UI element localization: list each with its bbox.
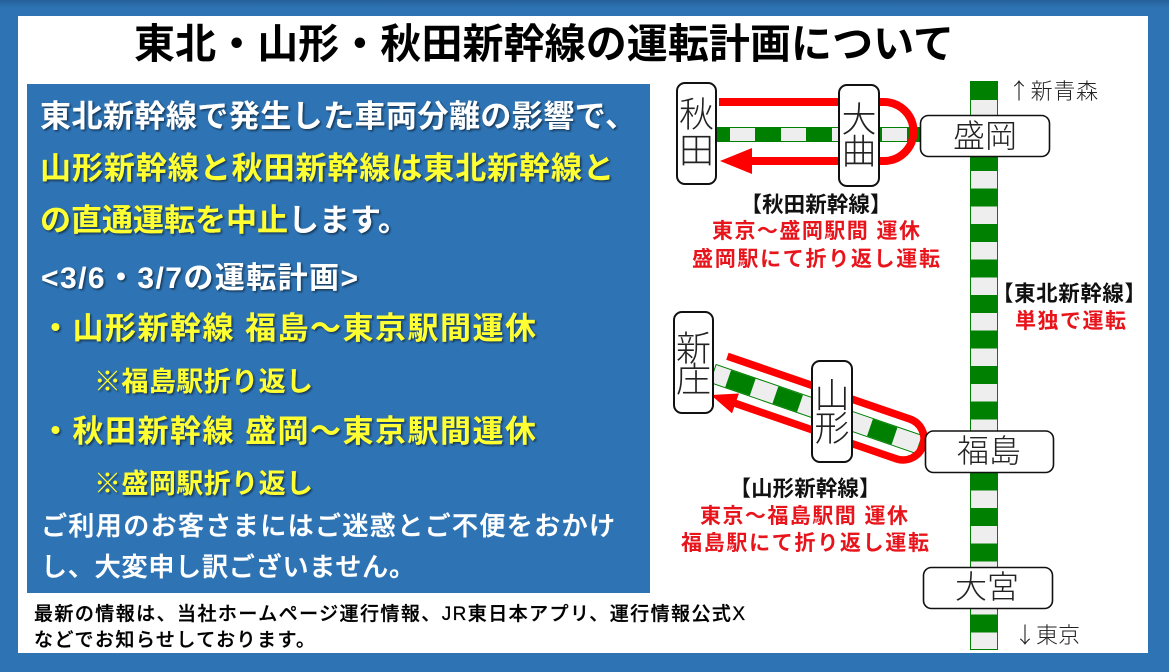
text block: operation plan: <3/6・3/7の運転計画> bbox=[41, 262, 358, 295]
station: 山形: 形 bbox=[814, 401, 850, 452]
text block: operation plan: ・秋田新幹線 盛岡～東京駅間運休 bbox=[40, 414, 536, 449]
label: Yamagata Shinkansen plan: 福島駅にて折り返し運転 bbox=[681, 532, 929, 555]
text block: footer note: 最新の情報は、当社ホームページ運行情報、JR東日本アプリ、運行情報公式X bbox=[34, 603, 745, 625]
text block: footer note bbox=[34, 603, 745, 651]
station: 山形: 山 bbox=[814, 368, 850, 419]
text block: apology bbox=[41, 511, 615, 582]
diagram: Tohoku Shinkansen track bbox=[970, 81, 998, 650]
station: 秋田: 田 bbox=[679, 123, 714, 174]
title: 東北・山形・秋田新幹線の運転計画について bbox=[134, 21, 954, 67]
label: Tohoku Shinkansen plan: 単独で運転 bbox=[1015, 310, 1126, 333]
station: 山形 bbox=[812, 361, 852, 462]
label: Akita Shinkansen plan: 東京～盛岡駅間 運休 bbox=[712, 220, 920, 243]
diagram: Yamagata Shinkansen branch bbox=[703, 354, 930, 476]
label: Akita Shinkansen plan bbox=[692, 193, 940, 271]
station: 新庄 bbox=[674, 312, 713, 413]
label: Yamagata Shinkansen plan: 【山形新幹線】 bbox=[730, 477, 880, 501]
diagram: Akita Shinkansen branch bbox=[716, 102, 922, 174]
station: 福島 bbox=[926, 426, 1054, 472]
panel: operation plan text bbox=[27, 84, 650, 593]
label: Yamagata Shinkansen plan bbox=[681, 477, 929, 555]
station: 大宮: 大宮 bbox=[955, 562, 1019, 608]
text block: intro message bbox=[40, 99, 636, 238]
label: Tohoku Shinkansen plan bbox=[992, 282, 1146, 333]
label: to Shin-Aomori: ↑新青森 bbox=[1008, 74, 1098, 106]
label: Akita Shinkansen plan: 盛岡駅にて折り返し運転 bbox=[692, 248, 940, 271]
station: 福島: 福島 bbox=[957, 426, 1021, 472]
text block: operation plan: ※盛岡駅折り返し bbox=[94, 469, 313, 499]
station: 大宮 bbox=[924, 562, 1052, 608]
station: 新庄: 庄 bbox=[676, 352, 711, 403]
label: Yamagata Shinkansen plan: 東京～福島駅間 運休 bbox=[700, 505, 908, 528]
station: 盛岡 bbox=[920, 111, 1050, 157]
text block: intro message: 山形新幹線と秋田新幹線は東北新幹線と bbox=[40, 151, 614, 186]
text block: apology: し、大変申し訳ございません。 bbox=[41, 552, 415, 582]
label: Tohoku Shinkansen plan: 【東北新幹線】 bbox=[992, 282, 1146, 306]
text block: apology: ご利用のお客さまにはご迷惑とご不便をおかけ bbox=[41, 511, 615, 541]
station: 盛岡: 盛岡 bbox=[953, 111, 1017, 157]
station: 秋田 bbox=[677, 83, 716, 184]
text block: operation plan bbox=[40, 262, 536, 499]
text block: intro message: 東北新幹線で発生した車両分離の影響で、 bbox=[40, 99, 636, 134]
text block: footer note: などでお知らせしております。 bbox=[34, 629, 315, 651]
text block: operation plan: ※福島駅折り返し bbox=[94, 367, 313, 397]
label: Akita Shinkansen plan: 【秋田新幹線】 bbox=[740, 193, 892, 217]
arrow: Akita turnback route bbox=[719, 102, 914, 174]
station: 大曲: 大 bbox=[841, 92, 877, 143]
station: 大曲: 曲 bbox=[841, 124, 877, 175]
text block: operation plan: ・山形新幹線 福島～東京駅間運休 bbox=[40, 311, 536, 346]
station: 秋田: 秋 bbox=[679, 87, 714, 138]
station: 新庄: 新 bbox=[676, 321, 711, 372]
station: 大曲 bbox=[839, 85, 879, 186]
text block: intro message: の直通運転を中止します。 bbox=[40, 203, 409, 238]
label: to Tokyo: ↓東京 bbox=[1014, 618, 1080, 650]
arrow: Yamagata turnback route bbox=[707, 355, 930, 476]
